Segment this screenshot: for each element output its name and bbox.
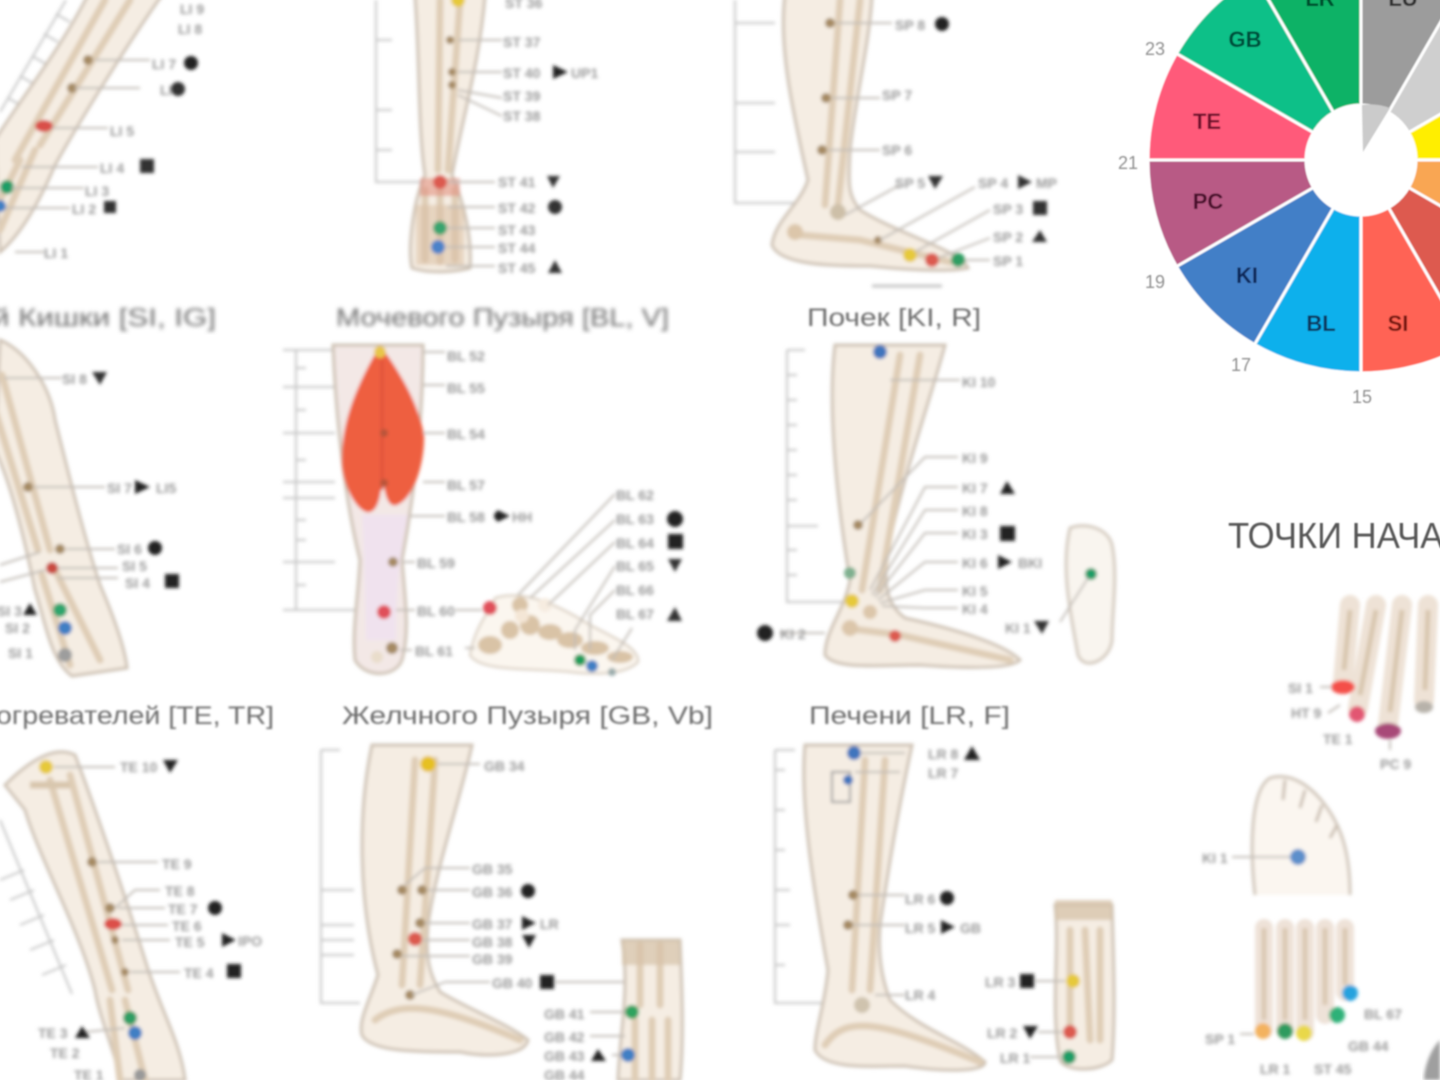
labels: BL points: BL 55	[447, 380, 485, 396]
illustration: foot sole with KI 1: KI 1	[1202, 850, 1228, 866]
labels: LI points: LI 1	[44, 245, 68, 261]
labels: BL points: BL 62	[616, 487, 654, 503]
labels: ST points: ST 40	[503, 65, 541, 81]
labels: wheel meridian codes: TE	[1193, 109, 1221, 134]
labels: LI points: LI 8	[178, 21, 202, 37]
panel: stomach meridian	[376, 0, 598, 276]
labels: GB points: LR	[540, 916, 559, 932]
labels: KI points: KI 8	[962, 503, 988, 519]
labels: LR points: LR 1	[1000, 1050, 1031, 1066]
labels: KI points: BKI	[1018, 555, 1042, 571]
labels: SP points: SP 7	[882, 87, 912, 103]
labels: wheel meridian codes: PC	[1193, 189, 1223, 214]
labels: KI points: KI 3	[962, 526, 988, 542]
labels: SI points: SI 5	[122, 558, 147, 574]
labels: GB points: GB 40	[492, 975, 533, 991]
labels: ST points: ST 41	[498, 174, 536, 190]
labels: SI points: SI 2	[5, 620, 30, 636]
illustration: leg, foot and sole with KI points	[780, 345, 1115, 667]
labels: hand points: PC 9	[1380, 756, 1411, 772]
labels: TE points: IPO	[238, 933, 262, 949]
illustration: foot top with toes and points: GB 44	[1348, 1038, 1389, 1054]
labels: BL points	[415, 348, 683, 659]
labels: SI points: SI 8	[62, 371, 87, 387]
labels: TE points: TE 5	[175, 934, 205, 950]
labels: KI points: KI 10	[962, 374, 996, 390]
labels: wheel meridian codes: BL	[1306, 311, 1336, 336]
labels: SI points: SI 6	[117, 541, 142, 557]
panel: kidney meridian	[757, 345, 1115, 667]
labels: LR points: GB	[960, 920, 981, 936]
labels: LR points: LR 2	[987, 1025, 1018, 1041]
labels: SI points: LI5	[156, 480, 176, 496]
illustration: foot top with toes and points: ST 45	[1314, 1061, 1352, 1077]
panel: triple heater meridian	[0, 752, 262, 1080]
labels: LI points: LI 4	[100, 160, 124, 176]
labels: BL points: BL 54	[447, 426, 485, 442]
labels: wheel hour numbers: 19	[1145, 272, 1165, 292]
labels: LR points: LR 3	[985, 974, 1016, 990]
labels: ST points: ST 45	[498, 260, 536, 276]
labels: wheel hour numbers: 23	[1145, 39, 1165, 59]
labels: LI points: LI 9	[180, 1, 204, 17]
labels: wheel meridian codes	[1193, 0, 1418, 336]
labels: GB points: GB 41	[544, 1006, 585, 1022]
labels: BL points: BL 67	[616, 606, 654, 622]
labels: KI points	[757, 374, 1049, 642]
illustration: arm with TE points	[0, 752, 185, 1080]
labels: GB points: GB 37	[472, 916, 513, 932]
illustration: leg and foot with GB points	[321, 745, 682, 1080]
illustration: foot top with toes and points: LR 1	[1260, 1061, 1291, 1077]
labels: TE points: TE 2	[50, 1045, 80, 1061]
labels: SI points: SI 1	[8, 645, 33, 661]
labels: wheel hour numbers: 17	[1231, 355, 1251, 375]
labels: BL points: BL 60	[417, 603, 455, 619]
illustration: foot top with toes and points	[1205, 928, 1402, 1077]
illustration: lower leg with ST points	[376, 0, 502, 272]
labels: TE points: TE 8	[165, 883, 195, 899]
labels: ST points: ST 44	[498, 240, 536, 256]
chart: meridian clock wheel	[1148, 0, 1440, 373]
illustration: leg and foot with LR points	[775, 745, 1114, 1070]
labels: SI points: SI 4	[125, 575, 150, 591]
labels: TE points: TE 9	[162, 856, 192, 872]
labels: BL points: BL 61	[415, 643, 453, 659]
panel: liver meridian	[775, 745, 1114, 1070]
labels: TE points: TE 3	[38, 1025, 68, 1041]
panel: spleen meridian	[735, 0, 1057, 286]
labels: LI points: LI 2	[72, 201, 96, 217]
labels: GB points: GB 38	[472, 934, 513, 950]
labels: KI points: KI 5	[962, 583, 988, 599]
labels: TE points	[38, 759, 262, 1080]
heading: gall bladder meridian: Желчного Пузыря [GB, Vb]	[342, 702, 713, 730]
panel: start points of the meridians	[1202, 605, 1440, 1080]
labels: GB points	[472, 758, 606, 1080]
labels: LR points: LR 8	[928, 746, 959, 762]
labels: GB points: GB 39	[472, 951, 513, 967]
labels: KI points: KI 6	[962, 555, 988, 571]
labels: SP points: SP 3	[993, 201, 1023, 217]
labels: TE points: TE 10	[120, 759, 158, 775]
panel: gall bladder meridian	[321, 745, 682, 1080]
heading: kidney meridian: Почек [KI, R]	[807, 304, 981, 332]
illustration: hand fingers with start points	[1320, 605, 1433, 750]
illustration: foot top with toes and points: BL 67	[1364, 1006, 1402, 1022]
labels: ST points: ST 39	[503, 88, 541, 104]
labels: GB points: GB 43	[544, 1048, 585, 1064]
illustration: foot sole with KI 1	[1202, 777, 1350, 895]
labels: LI points: LI 3	[85, 183, 109, 199]
labels: TE points: TE 7	[168, 901, 198, 917]
labels: LR points	[905, 746, 1038, 1066]
labels: GB points: GB 36	[472, 884, 513, 900]
labels: ST points: ST 37	[503, 34, 541, 50]
labels: wheel meridian codes: KI	[1236, 263, 1258, 288]
panel: bladder meridian	[283, 345, 683, 676]
labels: ST points: ST 42	[498, 200, 536, 216]
labels: wheel hour numbers: 15	[1352, 387, 1372, 407]
labels: SP points: SP 5	[895, 175, 925, 191]
labels: KI points: KI 2	[780, 626, 806, 642]
labels: hand points: HT 9	[1291, 705, 1322, 721]
labels: BL points: BL 64	[616, 535, 654, 551]
labels: SI points	[0, 371, 179, 661]
labels: ST points: UP1	[571, 65, 598, 81]
labels: hand points	[1288, 680, 1411, 772]
illustration: arm with LI points	[0, 0, 162, 252]
labels: TE points: TE 6	[172, 918, 202, 934]
labels: ST points: ST 43	[498, 222, 536, 238]
wedge: lung sector tip	[1362, 104, 1390, 152]
labels: BL points: BL 58	[447, 509, 485, 525]
labels: wheel meridian codes: GB	[1228, 27, 1262, 52]
labels: GB points: GB 35	[472, 861, 513, 877]
labels: LR points: LR 4	[905, 987, 936, 1003]
labels: GB points: GB 34	[484, 758, 525, 774]
labels: LI points: LI 7	[152, 56, 176, 72]
labels: hand points: SI 1	[1288, 680, 1313, 696]
labels: BL points: BL 65	[616, 558, 654, 574]
heading: liver meridian: Печени [LR, F]	[809, 702, 1010, 730]
labels: TE points: TE 4	[184, 965, 214, 981]
illustration: foot top with toes and points: SP 1	[1205, 1031, 1235, 1047]
labels: LI points: LI 5	[110, 123, 134, 139]
labels: SP points	[882, 17, 1057, 269]
labels: BL points: BL 57	[447, 477, 485, 493]
labels: BL points: BL 52	[447, 348, 485, 364]
labels: LI points: LI 6	[160, 82, 184, 98]
labels: KI points: KI 4	[962, 601, 988, 617]
illustration: calf with muscle and foot	[283, 345, 638, 676]
labels: SP points: MP	[1036, 175, 1057, 191]
heading: bladder meridian: Мочевого Пузыря [BL, V]	[336, 304, 669, 332]
labels: ST points	[498, 0, 598, 276]
labels: KI points: KI 1	[1005, 620, 1031, 636]
panel: large intestine meridian	[0, 0, 204, 261]
labels: LR points: LR 6	[905, 891, 936, 907]
labels: ST points: ST 38	[503, 108, 541, 124]
labels: SP points: SP 4	[978, 175, 1008, 191]
shape: corner element	[1424, 1040, 1440, 1080]
panel: small intestine meridian	[0, 340, 179, 676]
labels: BL points: BL 66	[616, 582, 654, 598]
labels: wheel hour numbers	[1118, 39, 1372, 407]
labels: SP points: SP 1	[993, 253, 1023, 269]
labels: BL points: BL 59	[417, 555, 455, 571]
labels: BL points: HH	[512, 509, 532, 525]
labels: KI points: KI 7	[962, 480, 988, 496]
heading: triple heater meridian: огревателей [TE, TR]	[0, 702, 274, 730]
labels: wheel hour numbers: 21	[1118, 153, 1138, 173]
labels: hand points: TE 1	[1323, 731, 1353, 747]
labels: LR points: LR 5	[905, 920, 936, 936]
illustration: leg and foot with SP points	[735, 0, 990, 286]
panel: meridian wheel	[1118, 0, 1440, 407]
labels: SP points: SP 2	[993, 229, 1023, 245]
illustration: arm with SI points	[0, 340, 127, 676]
labels: BL points: BL 63	[616, 511, 654, 527]
labels: wheel meridian codes: SI	[1388, 311, 1408, 336]
labels: SP points: SP 8	[895, 17, 925, 33]
labels: SI points: SI 7	[107, 480, 132, 496]
labels: LR points: LR 7	[928, 765, 959, 781]
labels: SP points: SP 6	[882, 142, 912, 158]
labels: KI points: KI 9	[962, 450, 988, 466]
labels: LI points	[44, 1, 204, 261]
labels: GB points: GB 42	[544, 1029, 585, 1045]
